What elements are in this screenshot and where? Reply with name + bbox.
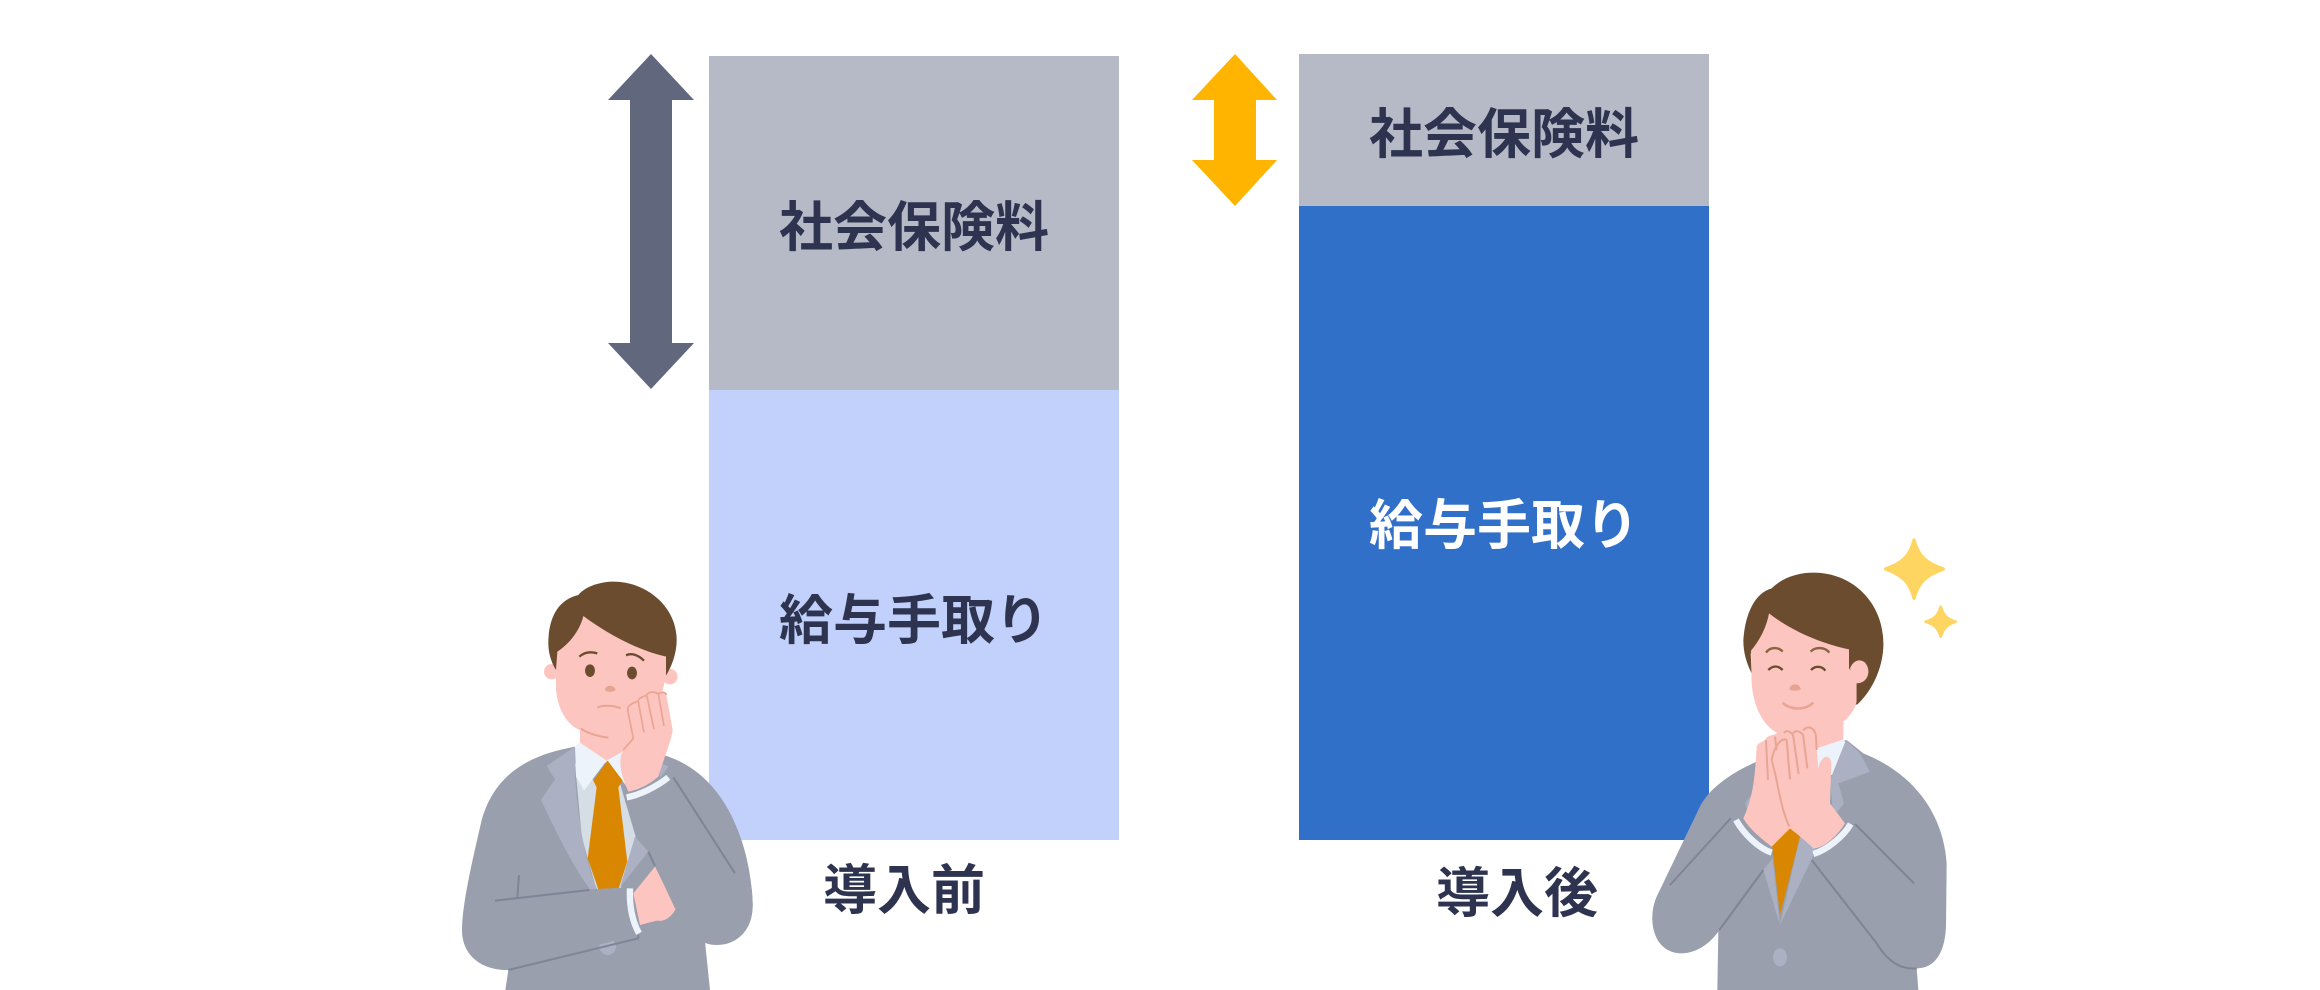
jacket seam lines <box>1670 818 1917 969</box>
lapels <box>1745 740 1870 925</box>
face and neck <box>544 613 678 763</box>
segment: take-home pay after: 給与手取り <box>1369 496 1639 556</box>
cuffs <box>627 777 668 933</box>
label: after introduction: 導入後 <box>1436 864 1598 924</box>
arrow: small social insurance range <box>1192 54 1277 206</box>
jacket body <box>462 747 753 990</box>
jacket body <box>1652 740 1947 990</box>
hand on cheek <box>620 692 673 792</box>
raised arm <box>625 777 753 945</box>
button <box>599 938 616 955</box>
cuffs <box>1736 820 1851 854</box>
illustration: happy businessman <box>1652 540 1956 990</box>
collar <box>1817 739 1847 775</box>
ear <box>1850 660 1868 683</box>
segment: social insurance before <box>709 56 1119 390</box>
arrow: large social insurance range <box>608 54 694 389</box>
segment: social insurance before: 社会保険料 <box>779 198 1049 258</box>
shirt <box>575 763 637 890</box>
hair side <box>1849 640 1883 705</box>
segment: take-home pay before: 給与手取り <box>779 591 1049 651</box>
sparkles <box>1886 540 1956 637</box>
bar: before introduction <box>709 56 1119 840</box>
segment: social insurance after <box>1299 54 1709 206</box>
fist <box>633 867 676 925</box>
segment: take-home pay after <box>1299 206 1709 840</box>
face features <box>579 652 644 738</box>
praying hands <box>1743 727 1845 848</box>
illustration: worried businessman <box>462 582 753 990</box>
button <box>1773 948 1787 966</box>
bar: after introduction <box>1299 54 1709 840</box>
face and neck <box>1751 613 1857 748</box>
face features <box>1766 648 1829 708</box>
segment: take-home pay before <box>709 390 1119 840</box>
forearm <box>483 865 657 970</box>
hair back <box>1743 573 1883 705</box>
hair <box>548 582 677 676</box>
tie <box>1772 827 1800 915</box>
collar <box>575 743 631 792</box>
jacket seam lines <box>495 777 735 970</box>
segment: social insurance after: 社会保険料 <box>1369 105 1639 165</box>
label: before introduction: 導入前 <box>823 861 985 921</box>
lapels <box>541 747 668 889</box>
tie <box>588 761 627 889</box>
